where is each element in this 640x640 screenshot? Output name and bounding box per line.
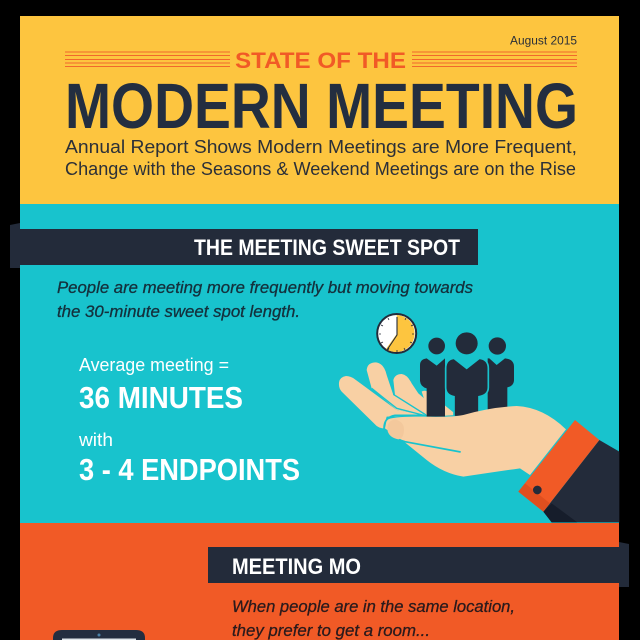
intro text: People are meeting more frequently but moving towards [57, 278, 473, 297]
icon: people [420, 332, 514, 417]
icon: hand [339, 332, 566, 477]
intro text: they prefer to get a room... [232, 621, 430, 640]
icon: tablet [53, 630, 145, 640]
heading banner: THE MEETING SWEET SPOT [194, 235, 460, 260]
stat: endpoints: with [78, 430, 113, 450]
heading banner [208, 542, 629, 587]
intro text [57, 278, 473, 321]
panel: sweet spot [10, 204, 619, 523]
subtitle: Annual Report Shows Modern Meetings are More Frequent, [65, 136, 577, 157]
stat: average meeting: 36 MINUTES [79, 380, 243, 415]
date: August 2015 [510, 36, 577, 48]
heading banner [10, 223, 478, 268]
stat: average meeting: Average meeting = [79, 355, 229, 375]
icon: clock [377, 314, 416, 353]
subtitle [65, 136, 577, 179]
panel: header [20, 16, 619, 204]
stat: average meeting [79, 355, 243, 415]
icon: cuff [518, 420, 599, 512]
icon: suit sleeve [518, 420, 619, 522]
panel: meeting mo [20, 523, 629, 640]
thumb outline [384, 415, 461, 452]
stat: endpoints: 3 - 4 ENDPOINTS [79, 452, 300, 487]
stat: endpoints [78, 430, 300, 487]
intro text: When people are in the same location, [232, 597, 515, 616]
fingers [339, 362, 457, 428]
intro text [232, 597, 515, 640]
heading: state of the: STATE OF THE [235, 48, 406, 73]
subtitle: Change with the Seasons & Weekend Meetings are on the Rise [65, 158, 576, 179]
palm [385, 406, 566, 477]
heading banner: MEETING MO [232, 554, 361, 579]
intro text: the 30-minute sweet spot length. [57, 302, 300, 321]
thumbnail [387, 419, 404, 439]
